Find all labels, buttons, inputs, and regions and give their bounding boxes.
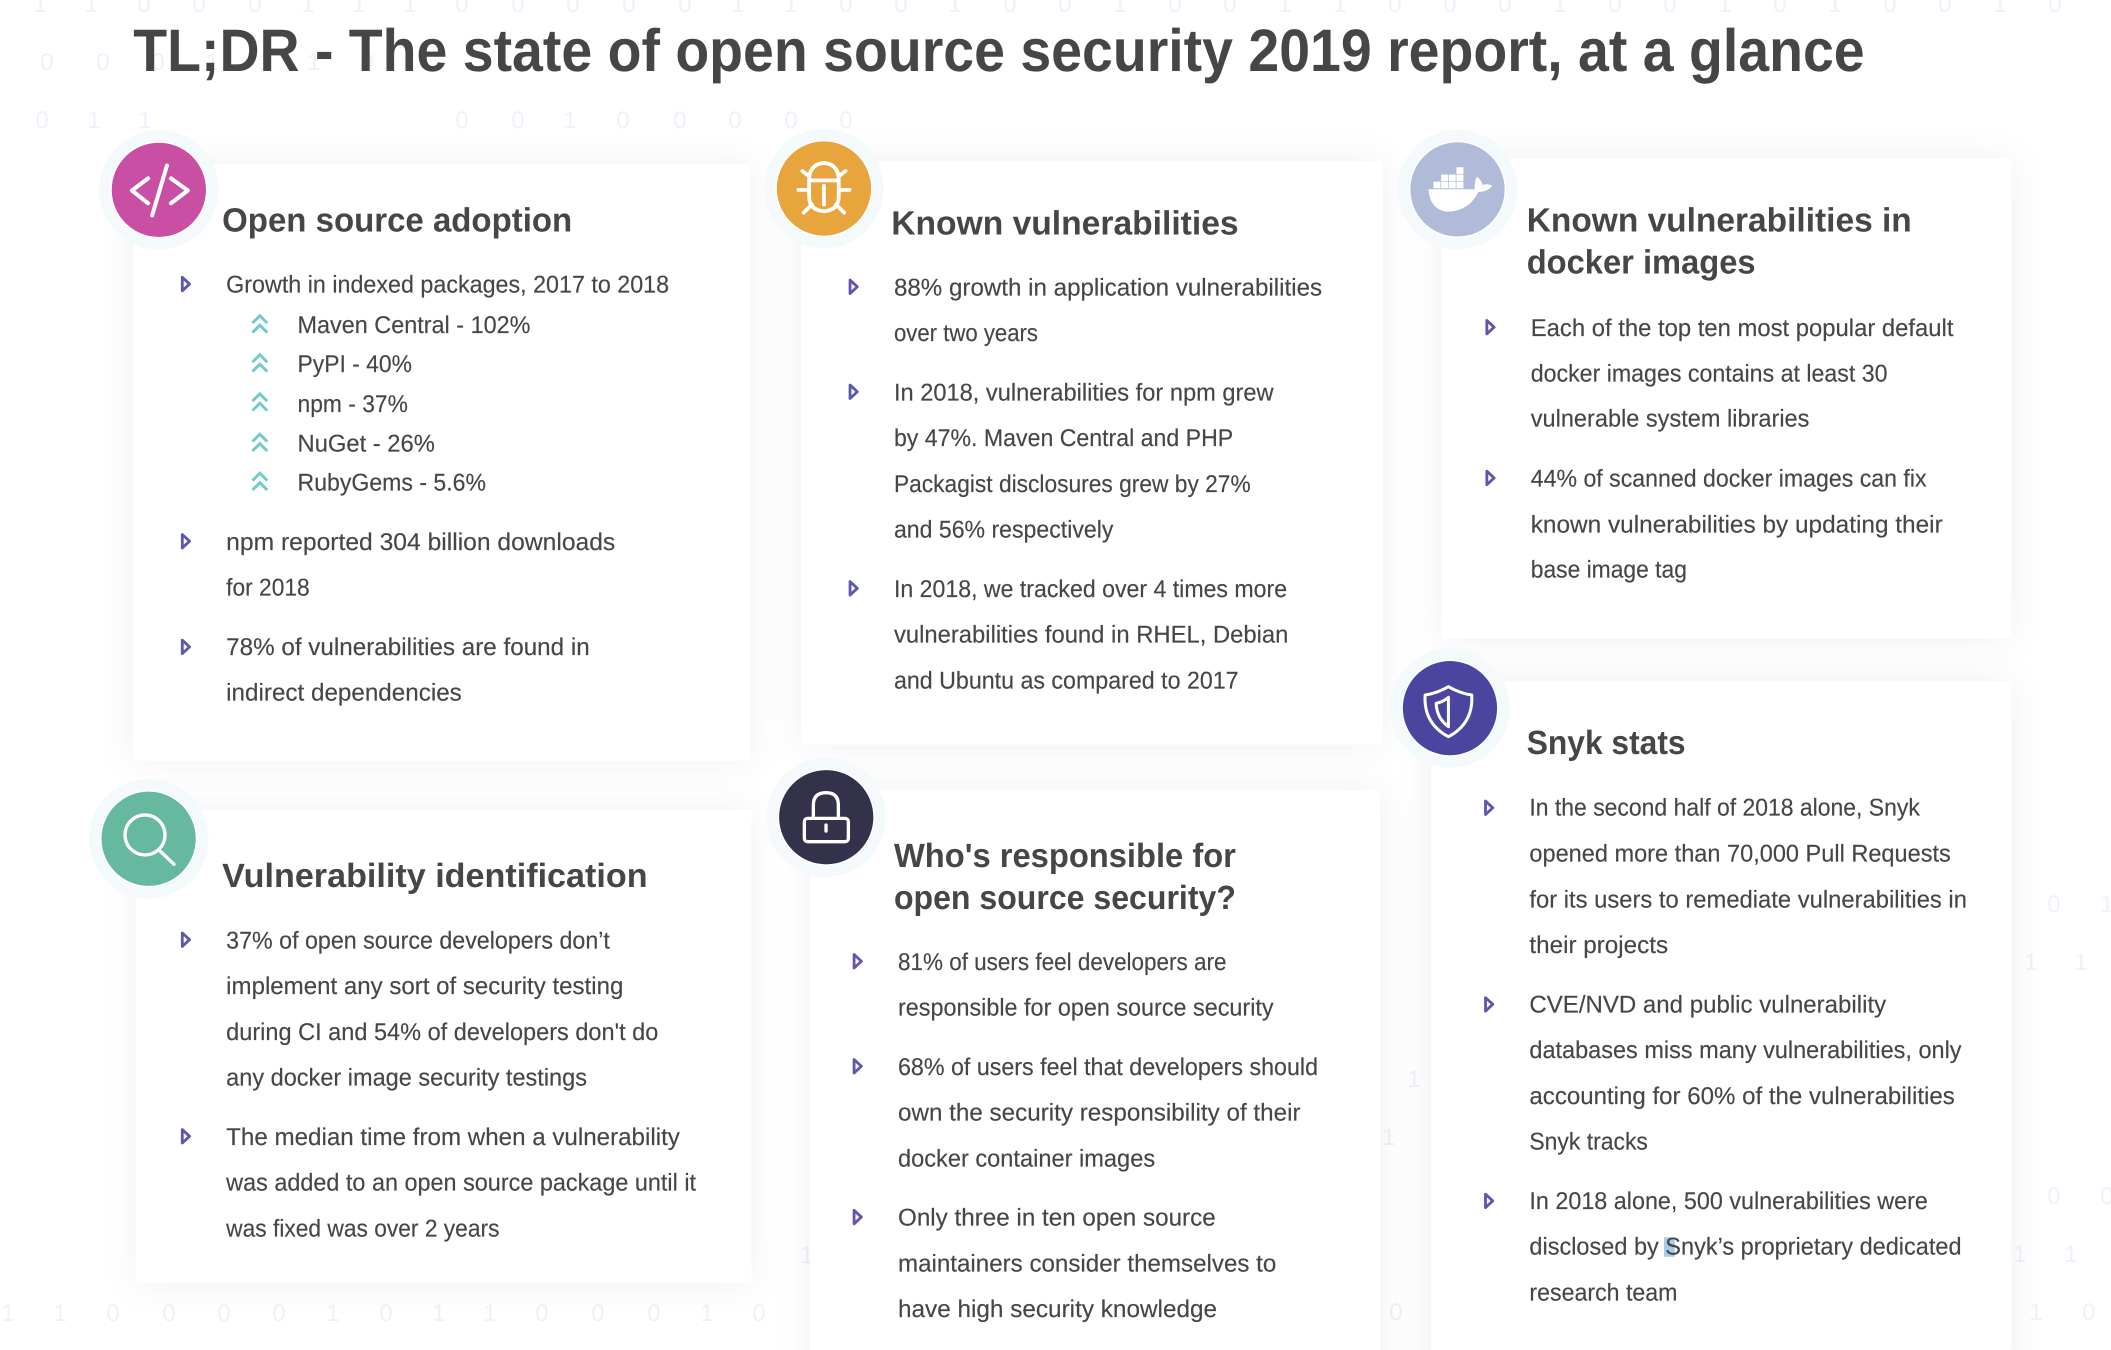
list: snyk facts: opened more than 70,000 Pull Requests [1529,840,1951,867]
background binary digits: 0 [40,49,54,76]
list: adoption facts: Growth in indexed packages, 2017 to 2018 [226,271,669,298]
background binary digits: 1 [307,49,321,76]
panel: known vulnerabilities in docker images [1398,130,2011,638]
list: responsibility facts: docker container images [898,1145,1155,1172]
list: docker facts: Each of the top ten most popular default [1531,314,1953,341]
list: responsibility facts: 68% of users feel that developers should [898,1053,1318,1080]
list: vulnerability facts [850,274,1322,694]
list: snyk facts: Snyk tracks [1529,1128,1648,1155]
list: identification facts: 37% of open source developers don’t [226,927,610,954]
background binary digits: 0 [379,1300,393,1327]
list: adoption facts [182,271,669,706]
list: vulnerability facts: In 2018, vulnerabilities for npm grew [894,379,1275,406]
list: identification facts: was added to an open source package until it [225,1169,696,1196]
background binary digits: 0 [162,1300,176,1327]
icon: shield [1390,648,1510,768]
background binary digits: 1 [2029,1299,2043,1326]
background binary digits: 0 [535,1300,549,1327]
list: vulnerability facts: and 56% respectively [894,516,1113,543]
heading: Open source adoption [222,202,572,240]
background binary digits: 0 [752,1300,766,1327]
background binary digits: 1 [563,107,577,134]
list: snyk facts: In the second half of 2018 alone, Snyk [1529,794,1921,821]
icon: magnifying glass [89,779,209,899]
list: identification facts: during CI and 54% of developers don't do [226,1018,658,1045]
background binary digits: 0 [2047,891,2061,918]
list: vulnerability facts: vulnerabilities found in RHEL, Debian [894,621,1288,648]
background binary digits: 0 [106,1300,120,1327]
background binary digits: 0 [591,1300,605,1327]
heading: open source security? [894,879,1236,917]
background binary digits: 0 [839,107,853,134]
list: adoption facts: indirect dependencies [226,679,462,706]
background binary digits: 0 [673,107,687,134]
list: adoption facts: PyPI - 40% [298,351,412,378]
background binary digits: 1 [800,1242,814,1269]
background binary digits: 1 [205,49,219,76]
list: responsibility facts [854,948,1318,1323]
background binary digits: 0 [647,1300,661,1327]
heading: Known vulnerabilities in [1527,202,1912,240]
list: snyk facts: accounting for 60% of the vulnerabilities [1529,1082,1955,1109]
list: identification facts: any docker image security testings [226,1064,587,1091]
title: TL;DR - The state of open source security 2019 report, at a glance [133,18,1865,84]
panel: snyk stats [1390,648,2011,1350]
icon: bug [764,129,884,248]
heading: docker images [1527,244,1756,281]
background binary digits: 1 [53,1300,67,1327]
list: adoption facts: NuGet - 26% [298,430,435,457]
list: adoption facts: Maven Central - 102% [298,312,530,338]
background binary digits: 1 [432,1300,446,1327]
panel: vulnerability identification [89,779,751,1283]
list: vulnerability facts: Packagist disclosures grew by 27% [894,470,1251,497]
background binary digits: 0 [360,49,374,76]
list: adoption facts: 78% of vulnerabilities are found in [226,633,590,660]
panel: known vulnerabilities [764,129,1383,745]
list: adoption facts: npm reported 304 billion downloads [226,528,615,555]
background binary digits: 0 [1389,1299,1403,1326]
background binary digits: 1 [87,107,101,134]
heading [894,837,1236,917]
panel: who's responsible [766,757,1380,1350]
list: docker facts: 44% of scanned docker images can fix [1531,465,1927,492]
heading: Snyk stats [1527,724,1686,762]
background binary digits: 0 [151,49,165,76]
list: vulnerability facts: In 2018, we tracked over 4 times more [894,575,1287,602]
background binary digits: 0 [2082,1299,2096,1326]
list: responsibility facts: responsible for open source security [898,994,1274,1021]
list: adoption facts: RubyGems - 5.6% [298,469,486,496]
background binary digits: 1 [700,1300,714,1327]
background binary digits: 1 [2024,949,2038,976]
list: snyk facts: disclosed by Snyk’s proprietary dedicated [1529,1233,1962,1260]
list: identification facts: implement any sort of security testing [226,973,623,999]
background binary digits: 0 [96,49,110,76]
background binary digits: 0 [728,107,742,134]
list: responsibility facts: maintainers consider themselves to [898,1250,1276,1277]
list: docker facts: known vulnerabilities by updating their [1531,511,1943,538]
list: identification facts: The median time from when a vulnerability [226,1123,680,1150]
list: snyk facts: databases miss many vulnerabilities, only [1529,1037,1962,1063]
background binary digits: 1 [326,1300,340,1327]
list: identification facts: was fixed was over 2 years [225,1215,499,1242]
background binary digits: 0 [455,107,469,134]
background binary digits: 0 [217,1300,231,1327]
list: docker facts [1487,314,1953,583]
background binary digits: 1 [2074,949,2088,976]
list: vulnerability facts: 88% growth in application vulnerabilities [894,274,1322,301]
heading: Known vulnerabilities [891,205,1239,242]
list: snyk facts: research team [1529,1279,1677,1306]
list: responsibility facts: have high security knowledge [898,1296,1217,1323]
list: snyk facts: their projects [1529,932,1668,958]
background binary digits: 0 [616,107,630,134]
background binary digits: 0 [35,107,49,134]
list: docker facts: vulnerable system libraries [1531,405,1809,432]
list: adoption facts: for 2018 [226,574,310,601]
list: vulnerability facts: and Ubuntu as compared to 2017 [894,667,1239,694]
list: responsibility facts: 81% of users feel developers are [898,948,1226,975]
background binary digits: 1 [2013,1241,2027,1268]
background binary digits: 1 [483,1300,497,1327]
icon: code brackets [99,130,219,250]
icon: padlock [766,757,886,877]
list: responsibility facts: Only three in ten open source [898,1204,1216,1231]
list: snyk facts: In 2018 alone, 500 vulnerabilities were [1529,1187,1928,1214]
heading [1527,202,1912,281]
heading: Vulnerability identification [222,858,648,895]
list: identification facts [182,927,696,1242]
background binary digits: 1 [258,49,272,76]
list: adoption facts: npm - 37% [298,390,408,417]
background binary digits: 0 [784,107,798,134]
background binary digits: 1 [1,1300,15,1327]
background binary digits: 0 [2047,1183,2061,1210]
background binary digits: 1 [138,107,152,134]
background binary digits: 0 [511,107,525,134]
list: vulnerability facts: over two years [894,320,1038,347]
list: responsibility facts: own the security responsibility of their [898,1099,1301,1126]
background binary digits: 0 [272,1300,286,1327]
list: snyk facts: CVE/NVD and public vulnerability [1529,991,1886,1018]
background binary digits: 1 [2064,1241,2078,1268]
list: snyk facts [1486,794,1967,1306]
list: docker facts: docker images contains at least 30 [1531,360,1888,387]
background binary digits: 1 [1382,1124,1396,1151]
heading: Who's responsible for [894,837,1236,875]
list: snyk facts: for its users to remediate vulnerabilities in [1529,886,1967,913]
list: docker facts: base image tag [1531,556,1687,583]
panel: open source adoption [99,130,750,761]
list: vulnerability facts: by 47%. Maven Central and PHP [894,425,1233,452]
background binary digits: 1 [1407,1066,1421,1093]
icon: docker whale [1398,130,1517,249]
